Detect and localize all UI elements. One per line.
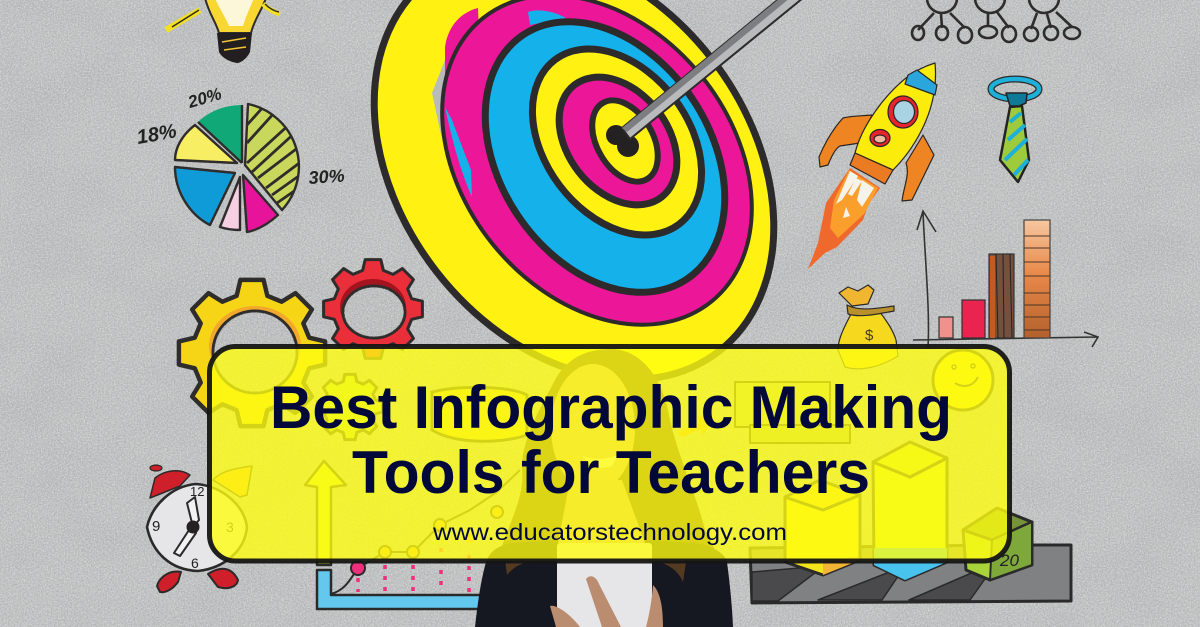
neck: [558, 480, 645, 543]
line chart and blue frame: [305, 461, 520, 609]
pie label: 18%: 18%: [135, 120, 179, 149]
rocket band: [905, 70, 937, 95]
bar: red: [962, 300, 985, 338]
clock face: [147, 484, 247, 571]
clock feet: [157, 569, 238, 592]
icon: alarm clock: 3: [226, 519, 234, 535]
heading: Best Infographic Making: [270, 374, 952, 441]
money: [735, 382, 830, 427]
icon: necktie: [991, 79, 1039, 182]
face: [551, 364, 635, 492]
bar: green: 20: [999, 551, 1019, 570]
heading line 2: Tools for Teachers: [352, 439, 870, 506]
hair strands: [505, 558, 686, 582]
pie label: 30%: 30%: [308, 166, 345, 188]
icon: light bulb: [166, 0, 280, 63]
smiley, money and cylinder behind box: [317, 350, 993, 443]
icon: alarm clock: 12: [190, 484, 204, 499]
clock bell: orange: [213, 466, 252, 497]
orange arrow: [677, 416, 714, 437]
icon: money bag: [838, 285, 898, 369]
rocket left fin: [819, 115, 872, 167]
cardigan: [475, 540, 733, 627]
gear hole texture: [214, 287, 404, 392]
clock hands: [174, 497, 199, 556]
bar: orange: [1024, 220, 1050, 338]
rocket base: [850, 153, 893, 184]
blue frame: [317, 570, 482, 609]
icon: alarm clock: 9: [152, 518, 160, 535]
chart axes: [913, 211, 1098, 347]
photo: woman holding tablet: [475, 349, 733, 627]
pie slice: lime 30%: [245, 104, 310, 210]
pie slice: magenta: [243, 175, 278, 232]
pie chart: [175, 104, 310, 232]
bar: cyan and lime: [873, 442, 947, 580]
bar: brown: [989, 254, 1014, 338]
gray base: [750, 545, 1071, 603]
bar: pink: [939, 317, 953, 338]
pie slice: green 20%: [198, 105, 242, 163]
bar: yellow: [785, 480, 860, 575]
bar chart: hand drawn: [913, 211, 1098, 347]
icon: alarm clock: 6: [191, 555, 199, 571]
icon: alarm clock: [147, 465, 252, 592]
title panel: [210, 346, 1010, 561]
chart dots: [351, 561, 365, 575]
rocket right fin: [902, 135, 934, 201]
clock bell: red: [150, 471, 190, 498]
pie slice: yellow 18%: [175, 125, 237, 163]
dotted drop lines: [358, 548, 469, 592]
lime arrow: [305, 461, 346, 565]
icon: yellow gear: [179, 280, 325, 426]
cylinder: [432, 387, 527, 441]
3D bars base: [750, 442, 1071, 603]
smile: [582, 455, 618, 468]
rocket body: [855, 63, 936, 170]
website url: www.educatorstechnology.com: [432, 519, 787, 545]
pie slice: pink: [220, 177, 240, 230]
icon: red gear: [324, 260, 422, 358]
icon: money bag: $: [865, 327, 874, 344]
hair: [498, 349, 720, 560]
rocket flame: [808, 168, 880, 269]
smiley: [933, 350, 993, 410]
target: concentric rings: [292, 0, 856, 458]
tablet: [557, 543, 652, 627]
icon: rocket: [808, 63, 937, 269]
pie slice: blue: [175, 167, 235, 225]
icon: hierarchy diagram: [912, 0, 1080, 43]
green gear: [317, 374, 383, 440]
arrow shaft in target: [622, 0, 803, 139]
rocket windows: [888, 96, 918, 128]
pie label: 20%: 20%: [185, 84, 224, 112]
chart line: [331, 470, 520, 594]
hand: fingers: [550, 576, 663, 627]
hatching: [752, 562, 997, 601]
bar: green: [963, 508, 1032, 580]
